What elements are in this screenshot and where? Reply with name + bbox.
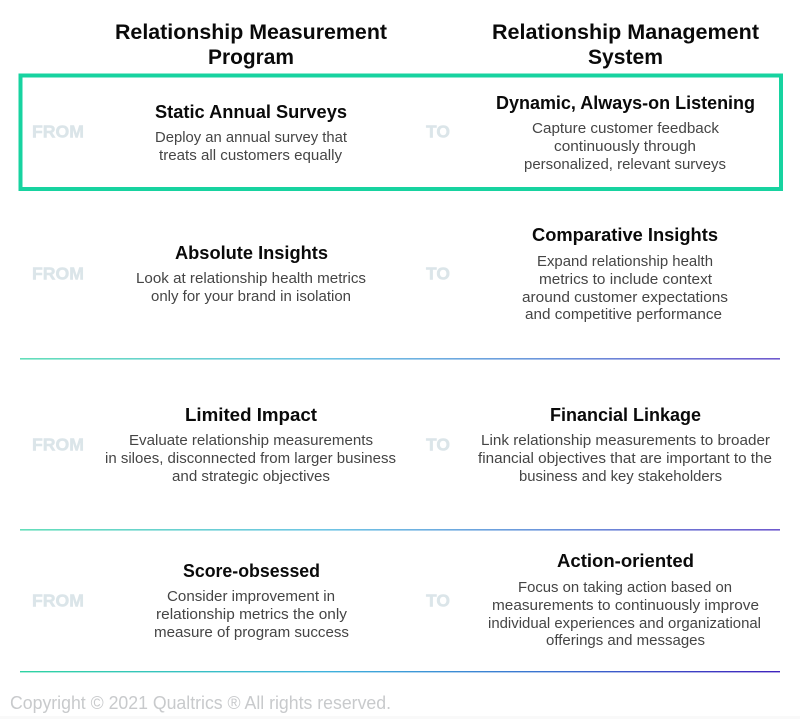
from text: static annual surveys: Static Annual Surveys — [155, 102, 347, 122]
from text: absolute insights: Look at relationship health metrics — [136, 271, 366, 287]
to text: comparative insights — [522, 225, 728, 323]
from text: limited impact: and strategic objectives — [172, 469, 330, 485]
to text: action-oriented: Action-oriented — [557, 551, 694, 571]
to label: TO — [426, 264, 450, 284]
from text: limited impact: Evaluate relationship measurements — [129, 433, 373, 449]
from text: absolute insights: only for your brand in isolation — [151, 289, 351, 305]
to text: dynamic listening: Dynamic, Always-on Listening — [496, 93, 755, 113]
row 3: limited impact to financial linkage — [32, 405, 772, 485]
from text: score-obsessed: measure of program success — [154, 625, 349, 641]
from text: limited impact: in siloes, disconnected from larger business — [105, 451, 396, 467]
from text: static annual surveys: Deploy an annual survey that — [155, 130, 347, 146]
to text: comparative insights: and competitive performance — [525, 307, 722, 323]
from text: absolute insights: Absolute Insights — [175, 243, 328, 263]
from text: score-obsessed: relationship metrics the only — [156, 607, 348, 623]
copyright footer: Copyright © 2021 Qualtrics ® All rights reserved. — [10, 693, 391, 713]
to label: TO — [426, 590, 450, 610]
to text: action-oriented: offerings and messages — [546, 633, 705, 649]
highlight box: first row — [20, 76, 781, 189]
heading: right column: System — [588, 46, 663, 69]
to text: comparative insights: around customer expectations — [522, 290, 728, 306]
to label: TO — [426, 122, 450, 142]
to text: comparative insights: Comparative Insights — [532, 225, 718, 245]
from text: limited impact: Limited Impact — [185, 405, 317, 425]
row 1: static surveys to always-on listening — [32, 93, 755, 173]
from label: FROM — [32, 590, 84, 610]
to text: action-oriented: individual experiences and organizational — [488, 616, 761, 632]
to text: financial linkage: Financial Linkage — [550, 405, 701, 425]
to text: comparative insights: metrics to include context — [539, 272, 712, 288]
to text: financial linkage: Link relationship measurements to broader — [481, 433, 770, 449]
to text: comparative insights: Expand relationship health — [537, 254, 713, 270]
heading: left column: Relationship Measurement — [115, 21, 387, 44]
to text: financial linkage — [478, 405, 772, 485]
from label: FROM — [32, 264, 84, 284]
from text: absolute insights — [136, 243, 366, 305]
row 4: score-obsessed to action-oriented — [32, 551, 761, 649]
from text: score-obsessed — [154, 561, 349, 641]
from text: static annual surveys: treats all customers equally — [159, 148, 343, 164]
to text: action-oriented: Focus on taking action based on — [518, 580, 732, 596]
to text: dynamic listening: Capture customer feedback — [532, 121, 720, 137]
to text: financial linkage: financial objectives that are important to the — [478, 451, 772, 467]
to label: TO — [426, 434, 450, 454]
heading: left column: Program — [208, 46, 294, 69]
to text: dynamic listening — [496, 93, 755, 173]
heading: right column: Relationship Management — [492, 21, 759, 44]
heading: right column — [492, 21, 759, 69]
from text: score-obsessed: Score-obsessed — [183, 561, 320, 581]
to text: dynamic listening: continuously through — [554, 139, 696, 155]
heading: left column — [115, 21, 387, 69]
from label: FROM — [32, 122, 84, 142]
from text: score-obsessed: Consider improvement in — [167, 589, 335, 605]
from label: FROM — [32, 434, 84, 454]
from text: static annual surveys — [155, 102, 347, 164]
to text: dynamic listening: personalized, relevant surveys — [524, 157, 726, 173]
to text: financial linkage: business and key stakeholders — [519, 469, 722, 485]
row 2: absolute to comparative insights — [32, 225, 728, 323]
to text: action-oriented — [488, 551, 761, 649]
from text: limited impact — [105, 405, 396, 485]
to text: action-oriented: measurements to continuously improve — [492, 598, 759, 614]
